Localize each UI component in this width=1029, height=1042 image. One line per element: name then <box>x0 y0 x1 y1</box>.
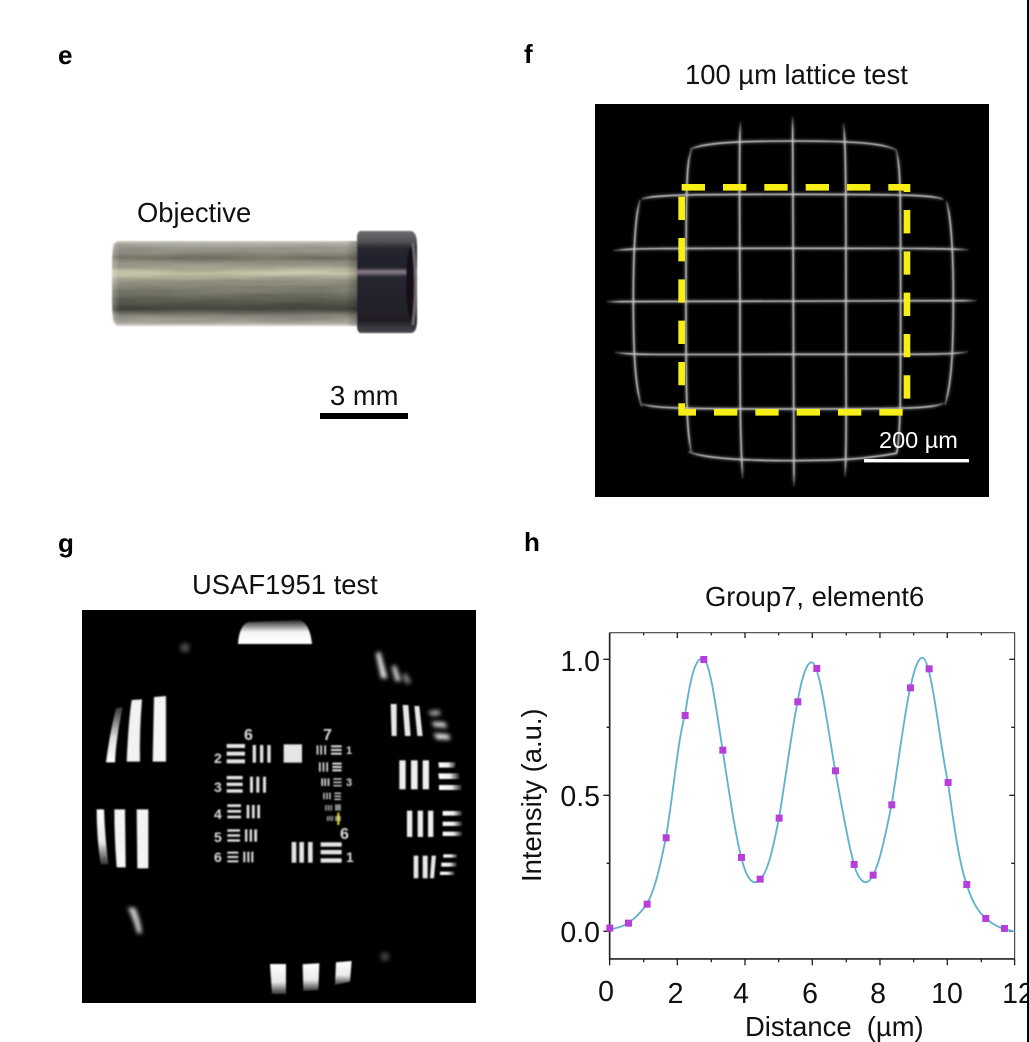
black right edge strip <box>1027 0 1029 1042</box>
x axis tick labels: 6 <box>802 978 818 1010</box>
target numerals: 6 <box>244 727 253 744</box>
x axis tick labels: 0 <box>598 976 614 1008</box>
panel h: intensity profile chart <box>516 581 1029 1042</box>
panel label g: g <box>58 528 74 558</box>
target numerals: 3 <box>214 779 222 795</box>
objective label: Objective <box>137 197 251 228</box>
x axis title: Distance (µm) <box>745 1011 924 1042</box>
scale bar 200 µm: 200 µm <box>879 427 958 453</box>
target numerals: 2 <box>214 750 222 766</box>
x axis tick labels: 8 <box>870 978 886 1010</box>
y axis tick labels <box>560 646 600 949</box>
outer right target bars <box>303 704 462 991</box>
panel e: objective photo <box>112 197 417 419</box>
objective barrel and head <box>112 231 417 333</box>
target numerals: 1 <box>346 745 352 757</box>
target numerals: 3 <box>346 777 352 789</box>
target numerals: 7 <box>323 727 332 744</box>
lattice image background <box>595 104 989 497</box>
panel g: USAF1951 test <box>82 569 476 1003</box>
distorted lattice grid <box>607 117 977 487</box>
x axis tick labels <box>598 976 1029 1010</box>
y axis tick labels: 0.5 <box>560 781 600 813</box>
y axis tick labels: 0.0 <box>560 917 600 949</box>
fitted blue curve <box>610 658 1015 931</box>
panel label e: e <box>58 40 72 70</box>
y axis tick labels: 1.0 <box>560 646 600 678</box>
target numerals: 6 <box>214 849 222 865</box>
x axis tick labels: 4 <box>733 978 749 1010</box>
x axis tick labels: 10 <box>931 978 963 1010</box>
target image background <box>82 610 476 1003</box>
target numerals: 4 <box>214 806 222 822</box>
panel label f: f <box>524 39 533 69</box>
heading Group7 element6: Group7, element6 <box>705 581 924 612</box>
scale bar 200 µm <box>864 427 969 462</box>
target numerals: 1 <box>346 849 354 865</box>
panel label h: h <box>524 527 540 557</box>
target numerals: 6 <box>340 826 349 843</box>
heading lattice test: 100 µm lattice test <box>685 59 908 90</box>
y axis title: Intensity (a.u.) <box>516 708 547 882</box>
faint blurred target spots <box>128 643 451 961</box>
x axis tick labels: 2 <box>668 978 683 1010</box>
yellow dashed region <box>682 187 907 412</box>
magenta data points <box>606 656 1008 932</box>
panel f: lattice test <box>595 59 989 497</box>
target numerals <box>214 727 354 865</box>
central groups 6 and 7 <box>227 744 342 863</box>
plot frame and ticks <box>603 633 1015 965</box>
target numerals: 5 <box>214 829 222 845</box>
heading USAF1951 test: USAF1951 test <box>192 569 378 600</box>
scale bar 3 mm: 3 mm <box>330 380 398 411</box>
scale bar 3 mm <box>320 380 408 419</box>
outer left target bars <box>97 620 312 994</box>
